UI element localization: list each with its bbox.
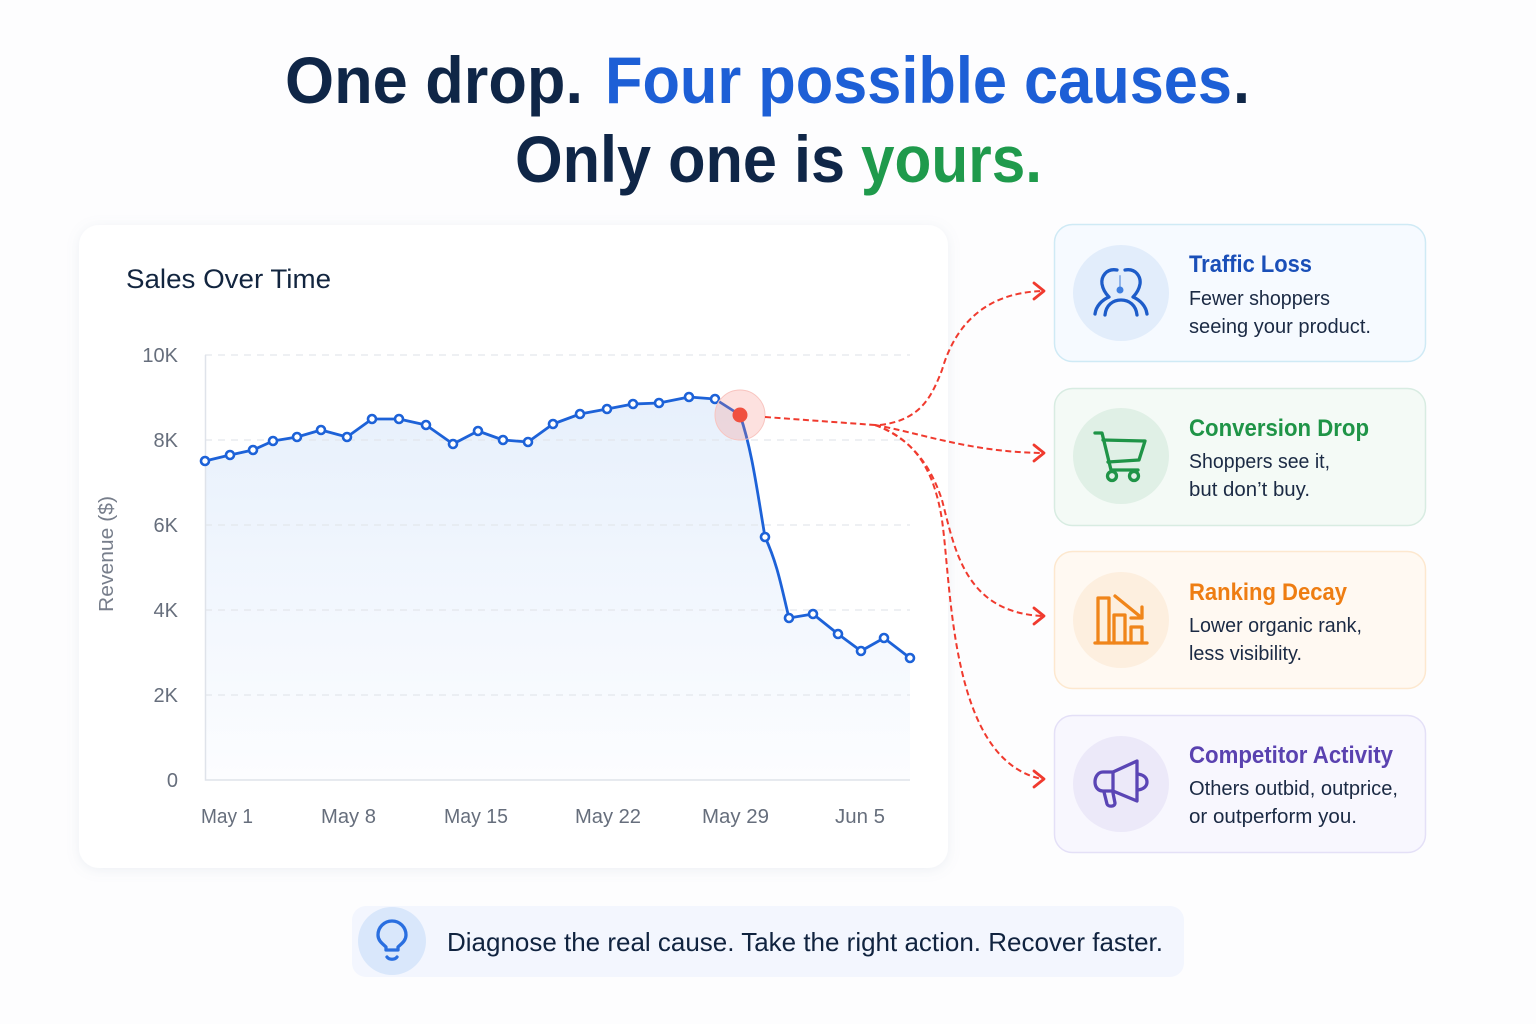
panel: traffic loss xyxy=(1054,224,1426,362)
text: traffic loss xyxy=(1189,251,1371,338)
x axis labels: May 1 xyxy=(201,806,253,828)
panel: conversion drop xyxy=(1054,388,1426,526)
callout text: Diagnose the real cause. Take the right action. Recover faster. xyxy=(447,927,1163,957)
text: traffic loss: seeing your product. xyxy=(1189,316,1371,338)
text: competitor activity: Others outbid, outprice, xyxy=(1189,778,1398,800)
text: ranking decay: Lower organic rank, xyxy=(1189,615,1362,637)
x axis labels: Jun 5 xyxy=(835,806,885,828)
panel: competitor activity xyxy=(1054,716,1426,852)
text: competitor activity xyxy=(1189,742,1398,828)
icon: shoppers xyxy=(1095,270,1147,315)
data points xyxy=(201,393,914,662)
title: Only one is xyxy=(515,122,845,196)
arrow: to competitor activity xyxy=(875,425,1044,787)
arrow: to conversion drop xyxy=(875,425,1044,461)
icon: falling bars xyxy=(1095,596,1147,643)
x axis labels: May 29 xyxy=(702,806,769,828)
panel: ranking decay xyxy=(1054,552,1426,688)
text: ranking decay: less visibility. xyxy=(1189,643,1302,665)
title: yours. xyxy=(861,122,1042,196)
text: competitor activity: or outperform you. xyxy=(1189,806,1357,828)
text: conversion drop: but don’t buy. xyxy=(1189,479,1310,501)
area under sales line xyxy=(205,397,910,780)
y axis title: Revenue ($) xyxy=(96,496,118,612)
y axis labels: 10K xyxy=(142,345,179,367)
y axis labels: 2K xyxy=(154,685,179,707)
y axis labels: 0 xyxy=(167,770,178,792)
y axis labels: 4K xyxy=(154,600,179,622)
x axis labels: May 8 xyxy=(321,806,376,828)
y axis labels: 8K xyxy=(154,430,179,452)
text: conversion drop: Shoppers see it, xyxy=(1189,451,1330,473)
chart heading: Sales Over Time xyxy=(126,264,331,294)
text: traffic loss: Traffic Loss xyxy=(1189,251,1312,278)
text: conversion drop xyxy=(1189,415,1369,501)
arrow: to ranking decay xyxy=(875,425,1044,624)
sales line xyxy=(205,397,910,658)
title: Four possible causes xyxy=(605,43,1232,117)
text: traffic loss: Fewer shoppers xyxy=(1189,288,1330,310)
text: ranking decay xyxy=(1189,579,1362,665)
callout xyxy=(352,906,1184,977)
title: One drop. xyxy=(285,43,583,117)
x axis labels: May 22 xyxy=(575,806,641,828)
arrow: to traffic loss xyxy=(880,283,1044,425)
icon: cart xyxy=(1095,433,1145,480)
y axis labels xyxy=(142,345,179,792)
text: ranking decay: Ranking Decay xyxy=(1189,579,1348,606)
panel: sales chart xyxy=(79,225,948,868)
x axis labels: May 15 xyxy=(444,806,508,828)
drop marker xyxy=(715,390,765,440)
text: competitor activity: Competitor Activity xyxy=(1189,742,1394,769)
icon: megaphone xyxy=(1095,761,1147,806)
x axis labels xyxy=(201,806,885,828)
title xyxy=(285,43,1250,196)
title: . xyxy=(1233,43,1250,117)
icon: lightbulb xyxy=(378,921,406,959)
text: conversion drop: Conversion Drop xyxy=(1189,415,1369,442)
arrows from drop to causes xyxy=(765,283,1044,787)
y axis labels: 6K xyxy=(154,515,179,537)
